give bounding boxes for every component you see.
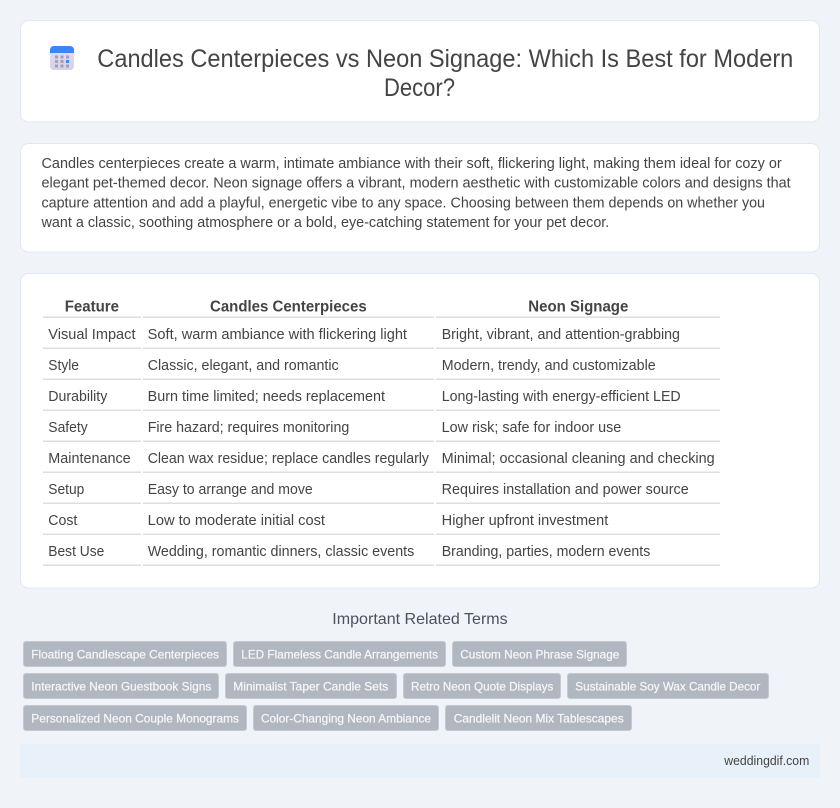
tag: [404, 674, 560, 698]
row: Style: Classic, elegant, and romantic: [148, 358, 339, 374]
row: Safety: Low risk; safe for indoor use: [442, 420, 621, 436]
row: Style: [43, 358, 720, 380]
tag: [568, 674, 768, 698]
panel: header: [20, 20, 820, 122]
row: Cost: Higher upfront investment: [442, 513, 608, 529]
row: Maintenance: [43, 451, 720, 473]
row: Visual Impact: [43, 327, 720, 349]
heading: related terms: Important Related Terms: [332, 611, 508, 628]
row: Cost: [43, 513, 720, 535]
tag: Color-Changing Neon Ambiance: [261, 711, 431, 725]
row: Setup: Setup: [48, 482, 84, 498]
tag: [24, 706, 246, 730]
row: Safety: Safety: [48, 420, 89, 436]
row: Durability: [43, 389, 720, 411]
table header row: Neon Signage: [528, 299, 628, 316]
tag: Minimalist Taper Candle Sets: [233, 679, 388, 693]
row: Cost: Low to moderate initial cost: [148, 513, 325, 529]
row: Setup: Easy to arrange and move: [148, 482, 313, 498]
row: Safety: [43, 420, 720, 442]
panel: summary paragraph: [20, 144, 820, 252]
row: Durability: Long-lasting with energy-efficient LED: [442, 389, 681, 405]
tag: [226, 674, 396, 698]
text block: summary: [40, 156, 791, 231]
tag: LED Flameless Candle Arrangements: [241, 647, 438, 661]
title: Candles Centerpieces vs Neon Signage: Which Is Best for Modern: [97, 45, 793, 73]
table header row: Candles Centerpieces: [210, 299, 367, 316]
tag: [24, 642, 226, 666]
tag: [452, 642, 626, 666]
tag: Interactive Neon Guestbook Signs: [31, 679, 211, 693]
text block: summary: capture attention and add a playful, energetic vibe to any space. Choosing between them depends on whether you: [42, 195, 765, 211]
row: Setup: Requires installation and power source: [442, 482, 689, 498]
tag: [234, 642, 446, 666]
row: Durability: Burn time limited; needs replacement: [148, 389, 385, 405]
title: [97, 45, 793, 102]
panel: comparison table: [20, 274, 820, 588]
footer bar: [20, 744, 820, 778]
row: Visual Impact: Visual Impact: [48, 327, 136, 343]
text block: summary: want a classic, soothing atmosphere or a bold, eye-catching statement for your pet decor.: [40, 215, 609, 231]
row: Visual Impact: Soft, warm ambiance with flickering light: [148, 327, 407, 343]
row: Cost: Cost: [48, 513, 77, 529]
tag: Candlelit Neon Mix Tablescapes: [454, 711, 624, 725]
row: Best Use: Wedding, romantic dinners, classic events: [148, 544, 414, 560]
tag list: related terms: [24, 642, 768, 730]
tag: Custom Neon Phrase Signage: [460, 647, 620, 661]
text block: summary: elegant pet-themed decor. Neon signage offers a vibrant, modern aesthetic with customizable colors and designs that: [42, 176, 791, 192]
tag: [24, 674, 218, 698]
tag: Sustainable Soy Wax Candle Decor: [575, 679, 760, 693]
title: Decor?: [384, 74, 455, 102]
row: Maintenance: Minimal; occasional cleaning and checking: [442, 451, 715, 467]
row: Maintenance: Clean wax residue; replace candles regularly: [148, 451, 430, 467]
row: Visual Impact: Bright, vibrant, and attention-grabbing: [442, 327, 680, 343]
text block: summary: Candles centerpieces create a warm, intimate ambiance with their soft, flickering light, making them ideal for cozy or: [42, 156, 782, 172]
tag: Retro Neon Quote Displays: [411, 679, 553, 693]
row: Durability: Durability: [48, 389, 108, 405]
icon: calendar: [50, 46, 74, 70]
footer source text: weddingdif.com: [723, 753, 809, 768]
tag: Personalized Neon Couple Monograms: [31, 711, 239, 725]
row: Safety: Fire hazard; requires monitoring: [148, 420, 349, 436]
row: Best Use: [43, 544, 720, 566]
row: Style: Modern, trendy, and customizable: [442, 358, 656, 374]
tag: Floating Candlescape Centerpieces: [31, 647, 219, 661]
table header row: [43, 299, 720, 318]
row: Style: Style: [48, 358, 79, 374]
row: Setup: [43, 482, 720, 504]
tag: [254, 706, 438, 730]
tag: [446, 706, 632, 730]
table header row: Feature: [65, 299, 119, 316]
row: Best Use: Branding, parties, modern events: [442, 544, 650, 560]
row: Best Use: Best Use: [48, 544, 104, 560]
row: Maintenance: Maintenance: [48, 451, 131, 467]
